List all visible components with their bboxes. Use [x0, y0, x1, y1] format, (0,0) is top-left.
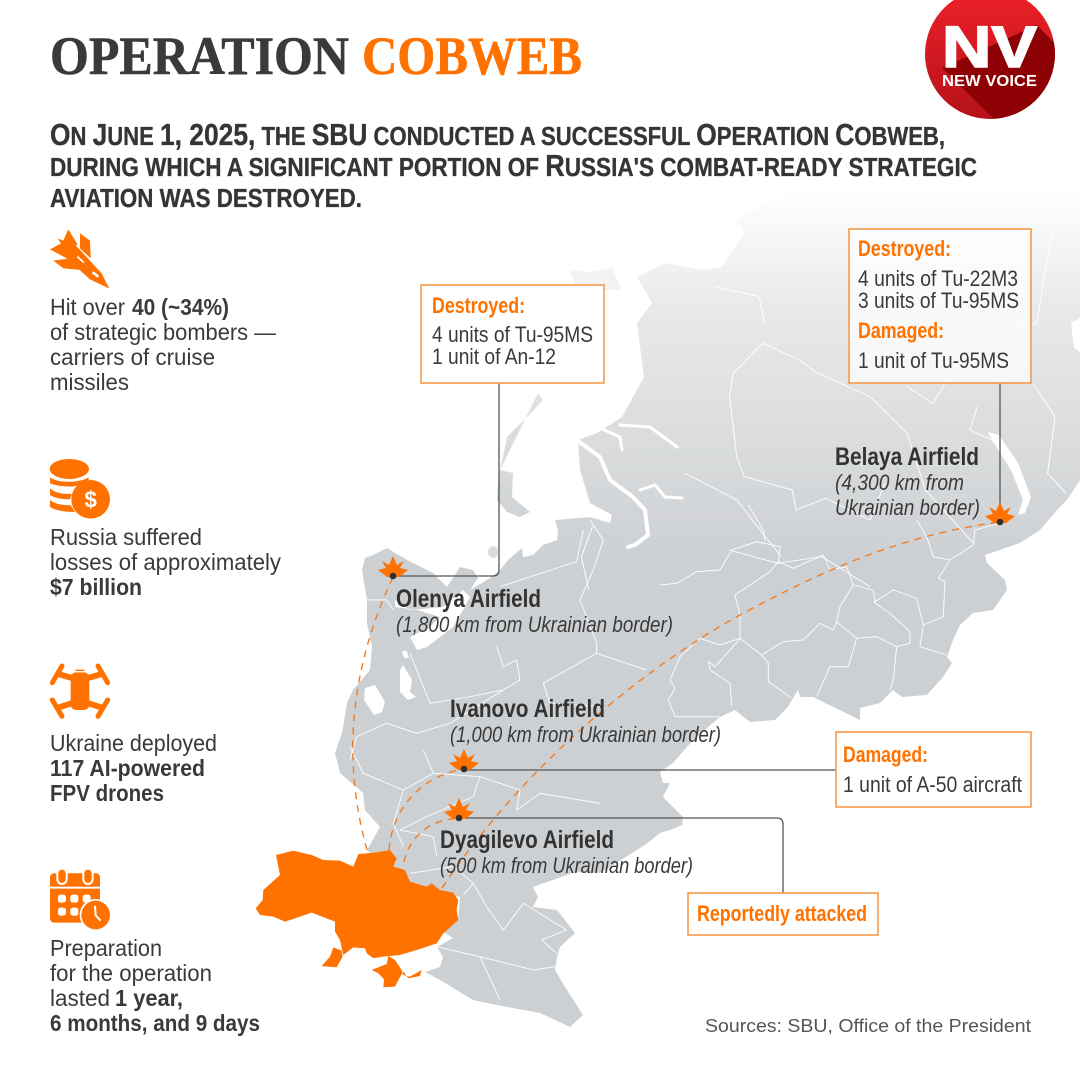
Kolguev island: [488, 546, 498, 558]
title: COBWEB: [362, 26, 582, 86]
label: Dyagilevo Airfield: Dyagilevo Airfield: [440, 826, 614, 854]
icon: drone: [52, 666, 108, 716]
callout: Dyagilevo: Reportedly attacked: [697, 901, 867, 926]
Novaya Zemlya: [497, 393, 543, 517]
sources: Sources: SBU, Office of the President: [705, 1015, 1031, 1036]
subtitle: ON JUNE 1, 2025, THE SBU CONDUCTED A SUCCESSFUL OPERATION COBWEB,: [50, 118, 945, 152]
callout: Olenya losses: 1 unit of An-12: [432, 344, 556, 369]
panel: bombers stat: of strategic bombers —: [50, 319, 276, 345]
title: OPERATION: [50, 26, 349, 86]
label: Dyagilevo Airfield: (500 km from Ukrainian border): [440, 853, 693, 878]
panel: preparation stat: [50, 869, 260, 1036]
panel: bombers stat: carriers of cruise: [50, 344, 215, 370]
label: Dyagilevo Airfield: [440, 826, 693, 878]
callout: Belaya losses: 4 units of Tu-22M3: [858, 266, 1018, 291]
marker: Ivanovo: [449, 749, 479, 772]
leader line: Belaya: [999, 383, 1001, 522]
subtitle: [50, 118, 977, 213]
marker: Olenya: [378, 556, 408, 579]
panel: drones stat: [50, 666, 217, 806]
leader line: Dyagilevo: [459, 818, 783, 893]
label: Olenya Airfield: [396, 585, 673, 637]
callout: Olenya losses: Destroyed:: [432, 293, 525, 318]
leader line: Olenya: [393, 383, 499, 576]
icon: calendar: [50, 869, 112, 931]
icon: coins: $: [84, 486, 97, 512]
panel: drones stat: 117 AI-powered: [50, 755, 205, 781]
callout: Olenya losses: 4 units of Tu-95MS: [432, 322, 593, 347]
panel: losses stat: [50, 459, 281, 600]
callout: Ivanovo losses: Damaged:: [843, 742, 928, 767]
marker: Dyagilevo: [444, 798, 474, 821]
panel: drones stat: Ukraine deployed: [50, 730, 217, 756]
panel: bombers stat: 40 (~34%): [132, 294, 229, 320]
panel: preparation stat: for the operation: [50, 960, 212, 986]
label: Belaya Airfield: Belaya Airfield: [835, 443, 979, 471]
northern islands: [570, 268, 622, 296]
panel: bombers stat: Hit over: [50, 294, 125, 320]
logo: NEW VOICE: [942, 73, 1037, 90]
icon: coins: [50, 459, 110, 519]
panel: losses stat: losses of approximately: [50, 549, 281, 575]
label: Olenya Airfield: (1,800 km from Ukrainian border): [396, 612, 673, 637]
label: Belaya Airfield: [835, 443, 980, 520]
panel: preparation stat: 1 year,: [115, 985, 183, 1011]
map of Ukraine: [256, 850, 458, 987]
panel: bombers stat: [50, 229, 276, 395]
callout: Olenya losses: [421, 285, 604, 383]
callout: Belaya losses: Destroyed:: [858, 236, 951, 261]
label: Ivanovo Airfield: Ivanovo Airfield: [450, 695, 605, 723]
Arctic gulfs: [578, 425, 682, 547]
subtitle: AVIATION WAS DESTROYED.: [50, 185, 362, 213]
regional borders: [350, 220, 1066, 1000]
label: Ivanovo Airfield: (1,000 km from Ukrainian border): [450, 722, 721, 747]
panel: preparation stat: 6 months, and 9 days: [50, 1010, 260, 1036]
label: Olenya Airfield: Olenya Airfield: [396, 585, 541, 613]
title: [50, 26, 582, 86]
callout: Ivanovo losses: 1 unit of A-50 aircraft: [843, 772, 1022, 797]
callout: Belaya losses: [849, 229, 1031, 383]
label: Belaya Airfield: Ukrainian border): [835, 495, 980, 520]
callout: Belaya losses: Damaged:: [858, 318, 944, 343]
leader line: Ivanovo: [464, 769, 836, 771]
logo: NV: [942, 15, 1037, 80]
callout: Dyagilevo: [688, 893, 878, 935]
callout: Belaya losses: 3 units of Tu-95MS: [858, 288, 1019, 313]
marker: Belaya: [985, 502, 1015, 525]
panel: preparation stat: lasted: [50, 985, 110, 1011]
panel: bombers stat: missiles: [50, 369, 129, 395]
panel: losses stat: Russia suffered: [50, 524, 202, 550]
logo: [925, 0, 1055, 119]
icon: jet: [50, 229, 109, 289]
panel: drones stat: FPV drones: [50, 780, 164, 806]
panel: preparation stat: Preparation: [50, 935, 162, 961]
callout: Ivanovo losses: [836, 732, 1031, 807]
subtitle: DURING WHICH A SIGNIFICANT PORTION OF RUSSIA'S COMBAT-READY STRATEGIC: [50, 149, 977, 183]
panel: losses stat: $7 billion: [50, 574, 142, 600]
callout: Belaya losses: 1 unit of Tu-95MS: [858, 348, 1009, 373]
map of Russia: [335, 150, 1080, 1027]
label: Belaya Airfield: (4,300 km from: [835, 470, 964, 495]
flight paths: [353, 522, 1000, 888]
White Sea and lakes: [364, 318, 1080, 715]
label: Ivanovo Airfield: [450, 695, 721, 747]
